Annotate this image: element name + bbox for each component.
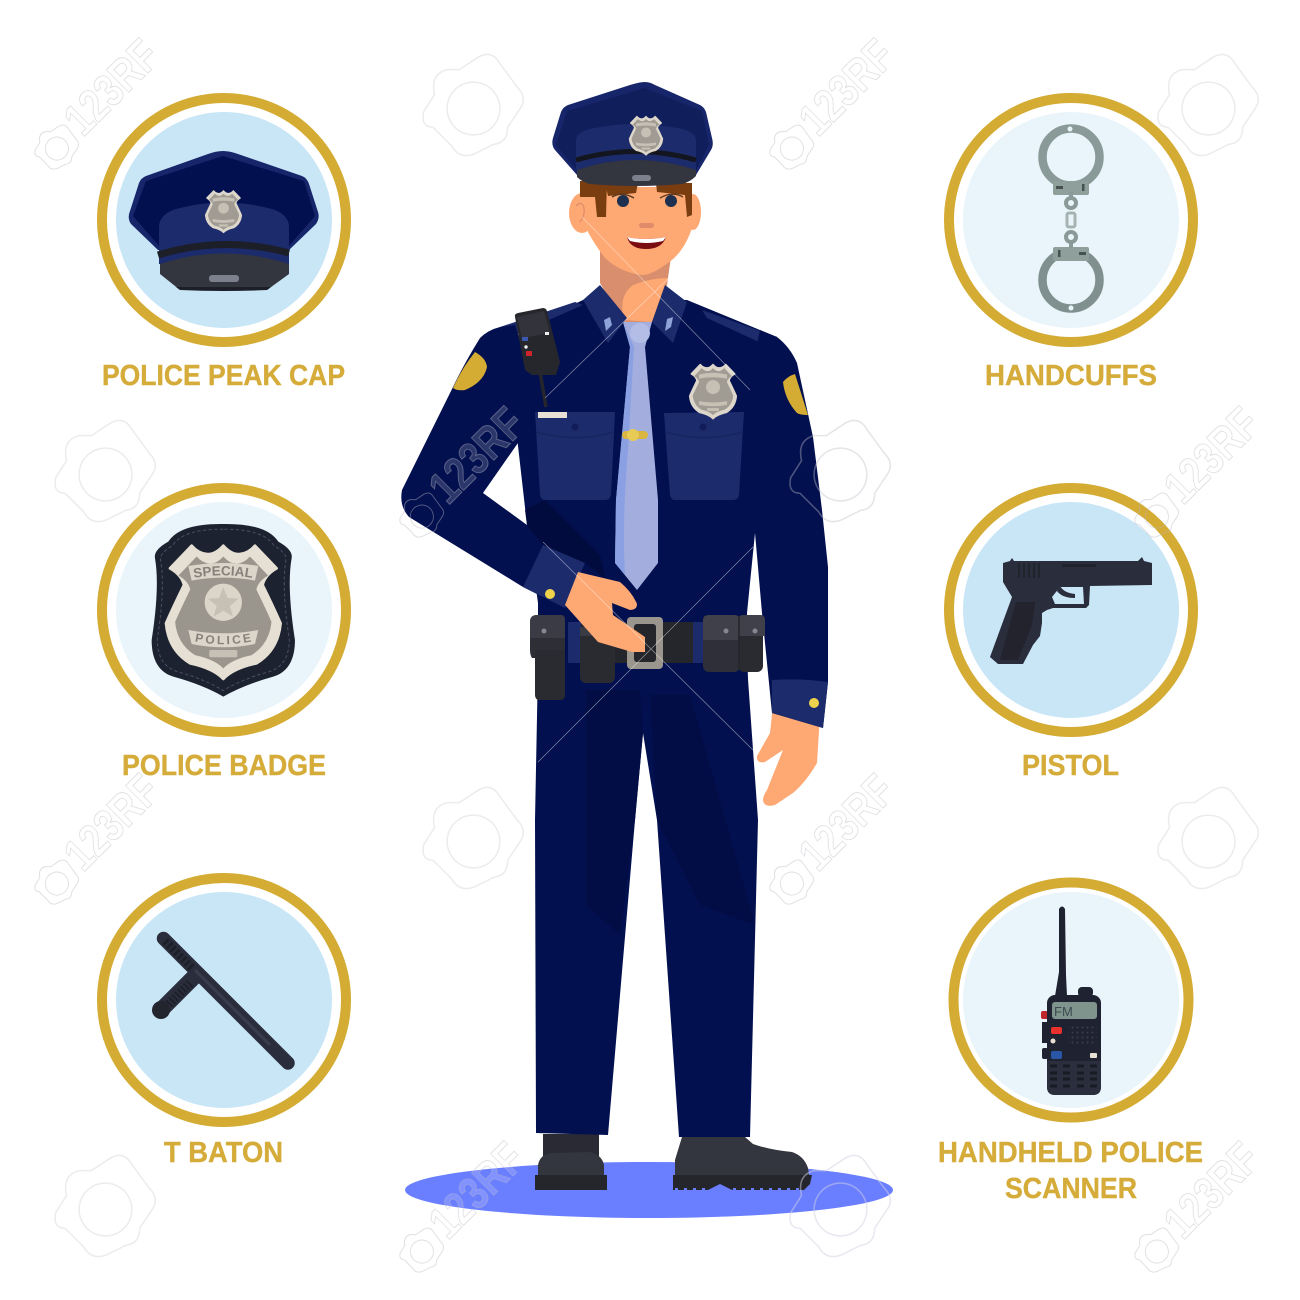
necktie <box>615 322 658 590</box>
ring: baton <box>102 878 346 1122</box>
name tag <box>538 412 567 418</box>
duty belt <box>530 615 765 700</box>
icon: handcuffs <box>1042 126 1100 310</box>
tie clip <box>622 429 648 441</box>
left arm <box>401 325 585 608</box>
thin diagonal overlay lines <box>538 217 753 762</box>
label: police badge: POLICE BADGE <box>122 750 326 782</box>
left cuff <box>523 545 585 608</box>
screen text: FM <box>1054 1004 1073 1019</box>
label: t baton: T BATON <box>164 1137 283 1169</box>
left cuff button <box>545 589 555 599</box>
figure: police officer <box>401 82 893 1218</box>
disc: cap <box>116 112 332 328</box>
icon: t baton <box>152 938 288 1063</box>
label: pistol: PISTOL <box>1022 750 1119 782</box>
arm shadow <box>525 500 605 578</box>
disc: baton <box>116 892 332 1108</box>
ring: scanner <box>954 882 1188 1118</box>
icon: pistol <box>990 557 1152 664</box>
shoulder patches <box>453 352 808 415</box>
disc: handcuffs <box>963 112 1179 328</box>
right arm <box>745 330 828 728</box>
ground shadow <box>405 1162 893 1218</box>
icon: radio scanner <box>1041 906 1101 1095</box>
ring: cap <box>102 98 346 342</box>
left hand <box>565 572 645 652</box>
jacket body <box>517 300 777 690</box>
panel: police badge <box>97 483 351 782</box>
panel: pistol <box>949 488 1193 782</box>
officer cap <box>552 82 713 186</box>
icon: police badge: POLICE <box>196 633 251 644</box>
trousers <box>535 665 758 1137</box>
panel: police peak cap <box>102 98 346 392</box>
neck <box>600 245 672 322</box>
chest badge <box>690 365 736 418</box>
right hand <box>757 705 820 806</box>
breast pockets <box>535 412 744 500</box>
disc: badge <box>116 502 332 718</box>
label: handheld police scanner <box>938 1137 1203 1205</box>
label: handheld police scanner: HANDHELD POLICE <box>938 1137 1203 1169</box>
ring: badge <box>102 488 346 732</box>
panel: handheld police scanner <box>938 882 1203 1205</box>
icon: police badge <box>152 524 295 697</box>
icon: peak cap <box>129 151 319 291</box>
label: police peak cap: POLICE PEAK CAP <box>102 360 345 392</box>
head <box>569 181 701 275</box>
right cuff <box>772 679 828 728</box>
panel: handcuffs <box>949 98 1193 392</box>
right cuff button <box>809 698 819 708</box>
disc: pistol <box>963 502 1179 718</box>
panel: t baton <box>102 878 346 1169</box>
icon: police badge: SPECIAL <box>194 566 252 578</box>
ring: pistol <box>949 488 1193 732</box>
label: handheld police scanner: SCANNER <box>1005 1173 1137 1205</box>
disc: scanner <box>963 892 1179 1108</box>
shoulder radio <box>515 308 560 407</box>
collar and shoulder straps <box>500 285 777 348</box>
boots <box>535 1134 812 1190</box>
ring: handcuffs <box>949 98 1193 342</box>
label: handcuffs: HANDCUFFS <box>985 360 1157 392</box>
